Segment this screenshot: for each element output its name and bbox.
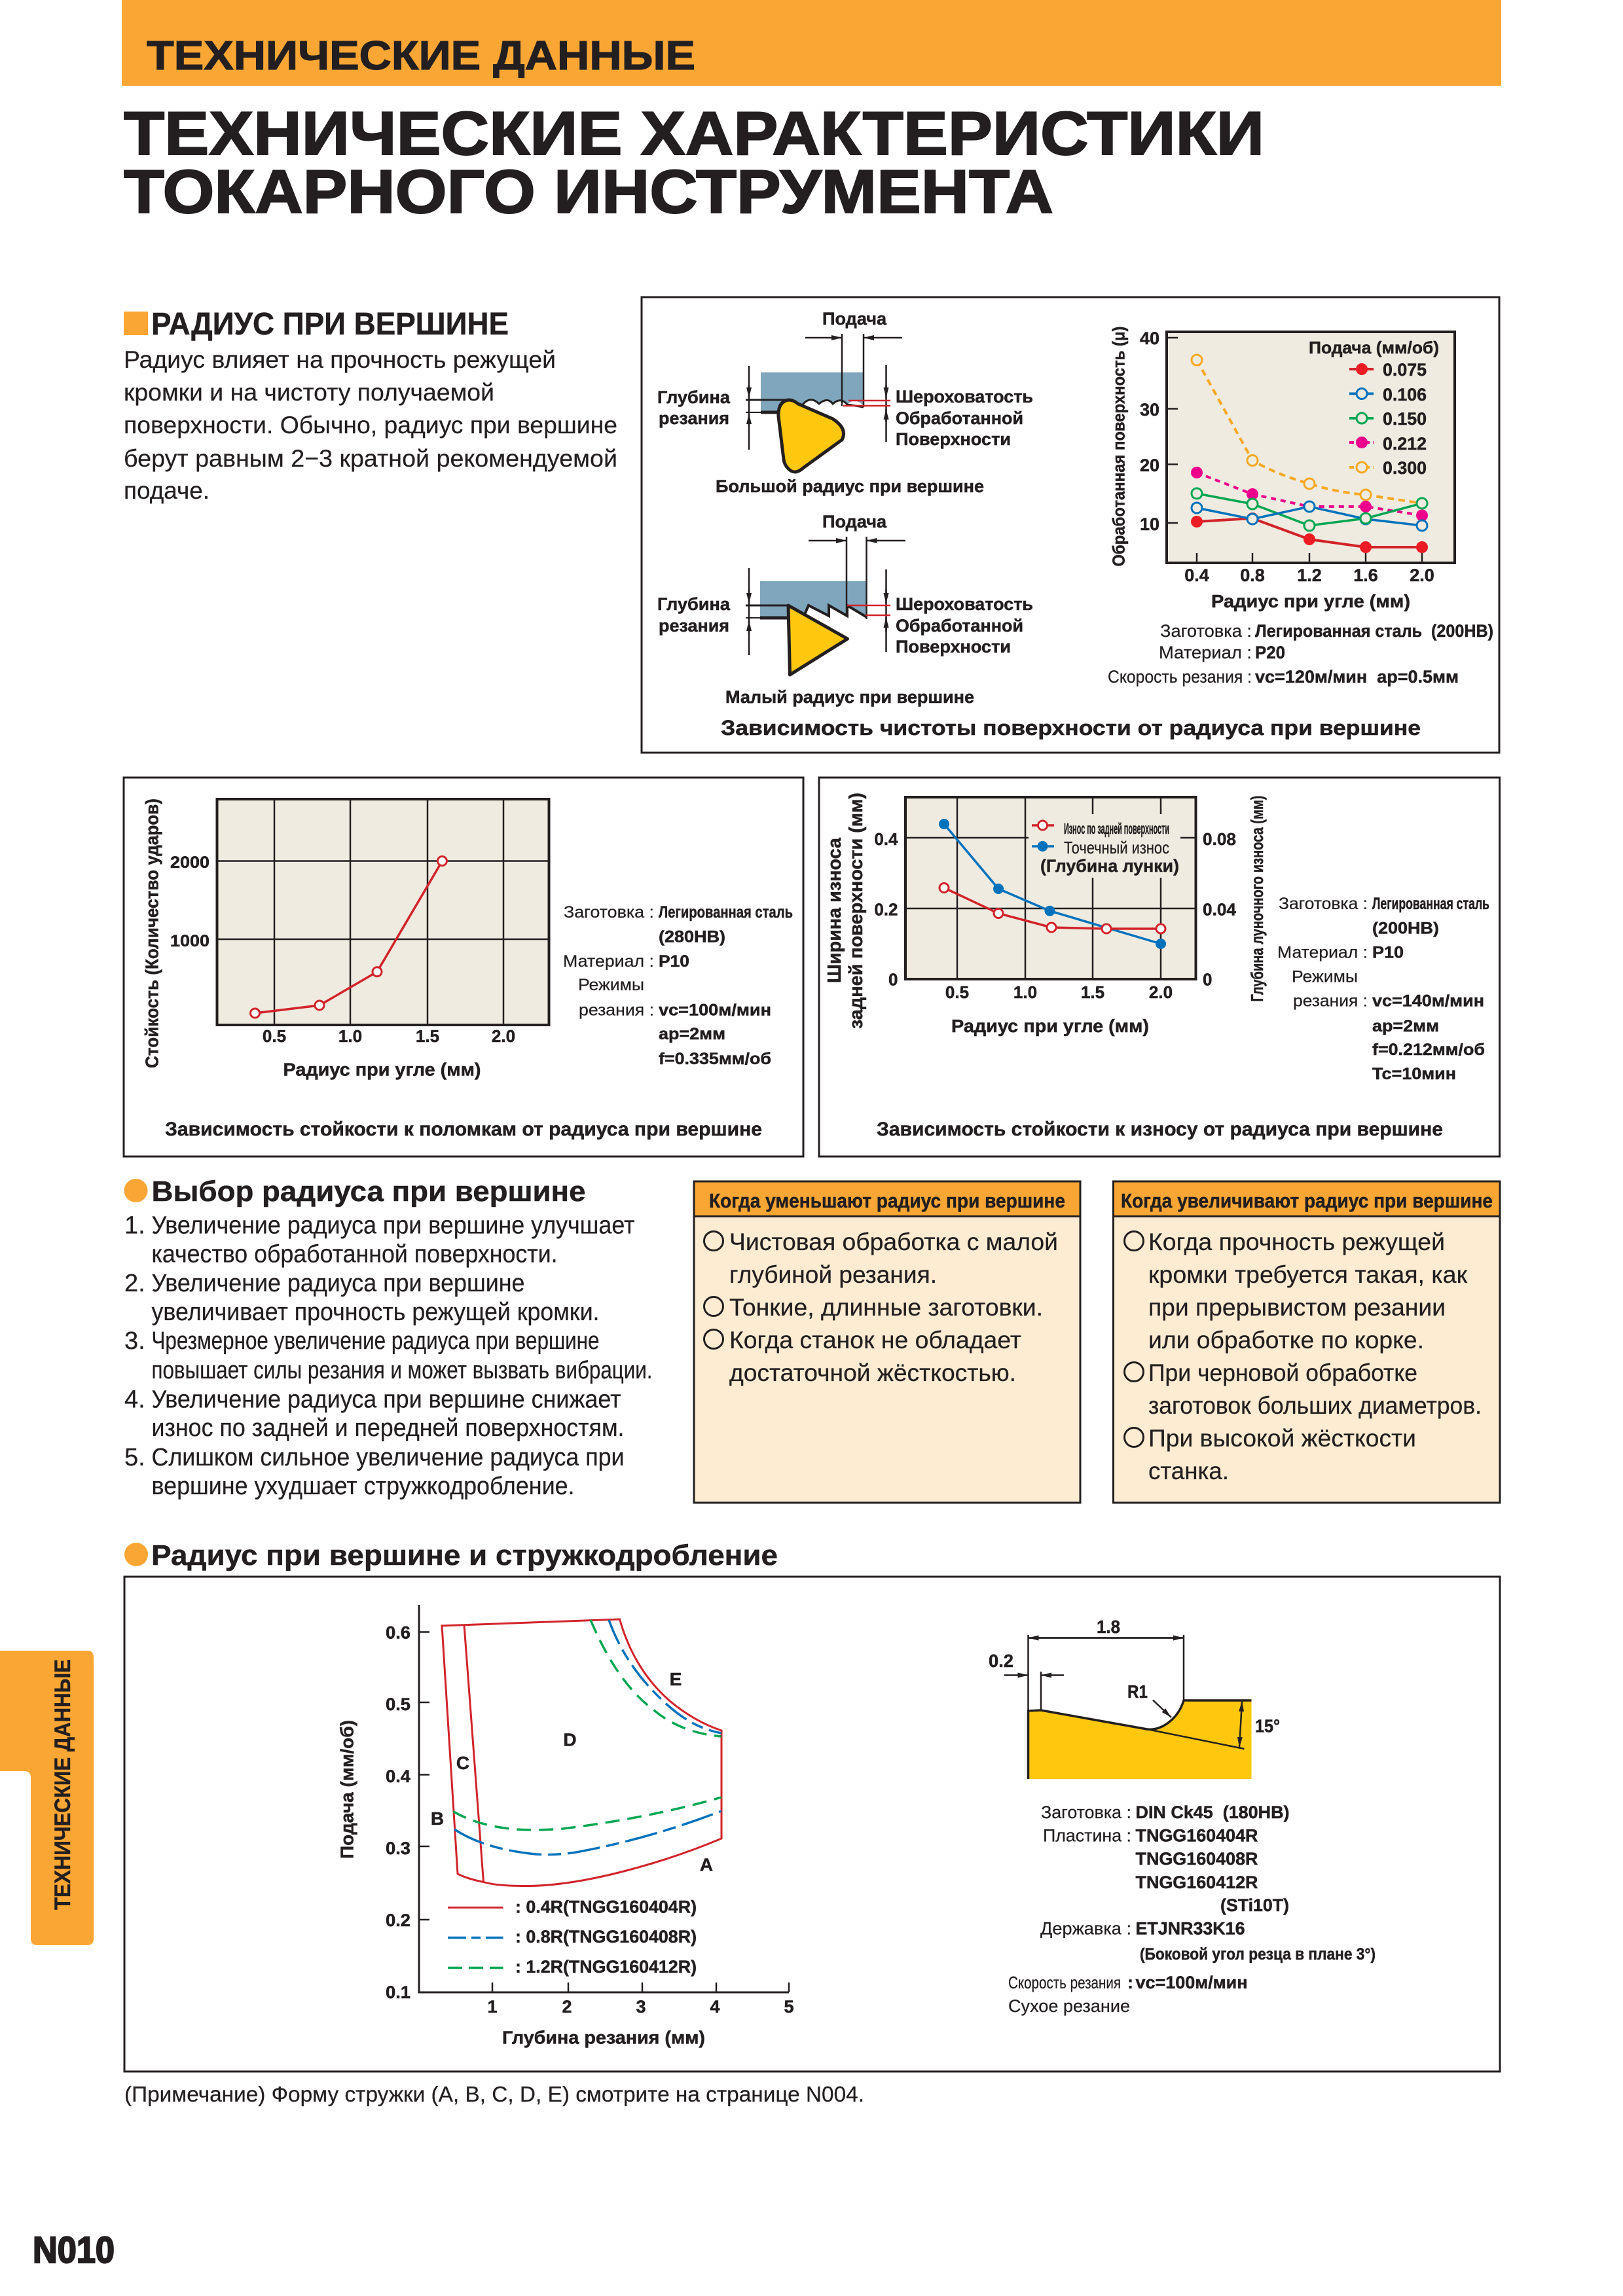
test conditions: breakage: Режимы [578, 976, 644, 994]
test conditions: chip breaking: Сухое резание [1008, 1996, 1130, 2016]
test conditions: chip breaking: Заготовка : [1041, 1803, 1131, 1822]
diagram: small nose radius [657, 512, 1033, 707]
line chart: flank and crater wear: задней поверхности (мм) [846, 793, 867, 1029]
header bar: ТЕХНИЧЕСКИЕ ДАННЫЕ [147, 33, 695, 79]
test conditions: chip breaking: Державка : [1040, 1919, 1131, 1939]
line chart: surface roughness: 20 [1140, 456, 1159, 475]
diagram: chipbreaker profile [989, 1617, 1280, 1779]
test conditions: breakage: Заготовка : [564, 903, 654, 922]
test conditions: chip breaking: : [1127, 1973, 1133, 1992]
line chart: impact count [141, 798, 549, 1080]
diagram: large nose radius: резания [659, 408, 729, 428]
test conditions: wear: Tc=10мин [1372, 1065, 1456, 1083]
chart: chip control regions [337, 1605, 794, 2047]
line chart: impact count: 0.5 [263, 1026, 286, 1046]
line chart: flank and crater wear [824, 793, 1267, 1036]
panel: when radius is increased: станка. [1148, 1458, 1229, 1484]
test conditions: chip breaking: (Боковой угол резца в плане 3°) [1140, 1945, 1376, 1964]
numbered list: вершине ухудшает стружкодробление. [152, 1473, 575, 1500]
chart: chip control regions: B [431, 1808, 444, 1829]
diagram: large nose radius: Поверхности [896, 429, 1011, 449]
panel: tool life vs breakage [124, 778, 803, 1157]
test conditions: wear: f=0.212мм/об [1372, 1041, 1485, 1059]
line chart: flank and crater wear: 0 [888, 970, 898, 990]
test conditions: breakage: резания : [579, 1001, 654, 1020]
intro paragraph: подаче. [124, 477, 210, 504]
legend: feed rates: 0.075 [1383, 360, 1427, 380]
test conditions: wear: Материал : [1277, 944, 1368, 962]
test conditions: breakage: vc=100м/мин [659, 1001, 771, 1020]
diagram: large nose radius [657, 309, 1033, 496]
line chart: impact count: 1.0 [338, 1026, 362, 1046]
test conditions: chip breaking: DIN Ck45 (180HB) [1135, 1803, 1290, 1822]
diagram: small nose radius: Малый радиус при вершине [725, 687, 974, 707]
test conditions: surface finish: Скорость резания : [1108, 667, 1252, 687]
legend: feed rates: 0.212 [1383, 434, 1427, 454]
legend: feed rates [1309, 338, 1439, 478]
panel: tool life vs wear [819, 778, 1499, 1157]
test conditions: wear: (200HB) [1372, 919, 1439, 937]
numbered list: Увеличение радиуса при вершине улучшает [152, 1212, 635, 1240]
diagram: small nose radius: Поверхности [896, 637, 1011, 656]
line chart: surface roughness: Радиус при угле (мм) [1211, 591, 1410, 611]
line chart: flank and crater wear: 1.0 [1013, 982, 1037, 1002]
page number: N010 [33, 2229, 115, 2271]
side tab [0, 1651, 94, 1945]
panel: when radius is increased: При высокой жёсткости [1148, 1425, 1416, 1452]
line chart: surface roughness: 0.4 [1184, 565, 1209, 585]
line chart: surface roughness: 0.8 [1240, 565, 1265, 585]
chart: chip control regions: 0.4 [386, 1767, 410, 1786]
side tab: ТЕХНИЧЕСКИЕ ДАННЫЕ [50, 1659, 75, 1910]
test conditions: breakage: P10 [659, 952, 689, 971]
numbered list: 3. [124, 1327, 145, 1355]
test conditions: wear: ap=2мм [1372, 1017, 1439, 1035]
test conditions: wear: Режимы [1292, 967, 1358, 986]
legend: feed rates: 0.300 [1383, 458, 1427, 478]
legend: insert radii: : 1.2R(TNGG160412R) [515, 1957, 697, 1977]
title: ТЕХНИЧЕСКИЕ ХАРАКТЕРИСТИКИ [124, 99, 1264, 168]
diagram: chipbreaker profile: R1 [1127, 1681, 1148, 1702]
panel caption: Зависимость стойкости к поломкам от радиуса при вершине [165, 1119, 762, 1140]
line chart: impact count: Стойкость (Количество ударов) [141, 798, 162, 1068]
diagram: small nose radius: Глубина [657, 594, 731, 614]
test conditions: surface finish: Заготовка : [1160, 621, 1252, 641]
intro paragraph [124, 346, 617, 504]
chart: chip control regions: 0.2 [386, 1910, 410, 1930]
line chart: flank and crater wear: 0 [1203, 970, 1212, 990]
line chart: flank and crater wear: Ширина износа [824, 837, 845, 983]
line chart: impact count: Радиус при угле (мм) [283, 1059, 481, 1080]
panel caption: Зависимость стойкости к износу от радиуса при вершине [877, 1119, 1443, 1140]
panel: when radius is increased: или обработке по корке. [1148, 1327, 1424, 1354]
diagram: large nose radius: Обработанной [896, 408, 1023, 428]
section heading: nose radius: РАДИУС ПРИ ВЕРШИНЕ [151, 307, 509, 342]
legend: insert radii: : 0.4R(TNGG160404R) [515, 1897, 697, 1916]
panel: when radius is reduced: Чистовая обработка с малой [729, 1229, 1058, 1255]
numbered list: износ по задней и передней поверхностям. [152, 1414, 625, 1442]
test conditions: wear: P10 [1372, 944, 1404, 962]
numbered list: повышает силы резания и может вызвать вибрации. [152, 1357, 652, 1384]
test conditions: chip breaking: TNGG160412R [1135, 1873, 1258, 1892]
line chart: flank and crater wear: 1.5 [1081, 982, 1104, 1002]
panel: when radius is increased: кромки требуется такая, как [1148, 1261, 1468, 1288]
test conditions: chip breaking: Скорость резания [1008, 1973, 1121, 1992]
test conditions: chip breaking: Пластина : [1043, 1826, 1131, 1846]
chart: chip control regions: E [670, 1669, 682, 1689]
numbered list: 5. [124, 1444, 145, 1471]
legend: wear types [1032, 820, 1179, 876]
intro paragraph: кромки и на чистоту получаемой [124, 379, 494, 406]
intro paragraph: Радиус влияет на прочность режущей [124, 346, 556, 373]
chart: chip control regions: Глубина резания (мм) [502, 2028, 705, 2047]
test conditions: wear: Заготовка : [1279, 895, 1368, 913]
title [124, 99, 1264, 226]
chart: chip control regions: 0.5 [386, 1695, 410, 1714]
line chart: impact count: 2000 [170, 853, 210, 872]
numbered list: увеличивает прочность режущей кромки. [152, 1299, 600, 1326]
title: ТОКАРНОГО ИНСТРУМЕНТА [124, 157, 1053, 226]
panel: when radius is increased [1113, 1181, 1500, 1503]
legend: wear types: Износ по задней поверхности [1064, 820, 1169, 837]
chart: chip control regions: 1 [487, 1997, 498, 2017]
legend: feed rates: Подача (мм/об) [1309, 338, 1439, 357]
panel: when radius is reduced: достаточной жёсткостью. [729, 1359, 1016, 1386]
line chart: impact count: 2.0 [492, 1026, 515, 1046]
test conditions: wear [1277, 895, 1489, 1083]
intro paragraph: берут равным 2−3 кратной рекомендуемой [124, 445, 617, 472]
test conditions: breakage: (280HB) [659, 928, 725, 946]
numbered list: Увеличение радиуса при вершине снижает [152, 1386, 621, 1414]
test conditions: chip breaking [1008, 1803, 1376, 2016]
chart: chip control regions: 2 [562, 1997, 572, 2017]
diagram: chipbreaker profile: 15° [1255, 1716, 1280, 1736]
test conditions: chip breaking: ETJNR33K16 [1135, 1919, 1245, 1939]
panel: when radius is reduced [694, 1181, 1080, 1503]
line chart: flank and crater wear: Радиус при угле (мм) [951, 1016, 1149, 1036]
diagram: chipbreaker profile: 1.8 [1097, 1617, 1120, 1637]
diagram: large nose radius: Большой радиус при вершине [716, 476, 984, 496]
chart: chip control regions: A [700, 1855, 713, 1874]
chart: chip control regions: 0.1 [386, 1982, 410, 2002]
intro paragraph: поверхности. Обычно, радиус при вершине [124, 412, 617, 439]
diagram: small nose radius: Шероховатость [896, 594, 1033, 614]
numbered list: 1. [124, 1212, 145, 1240]
test conditions: surface finish: P20 [1255, 643, 1285, 662]
numbered list: 2. [124, 1270, 145, 1297]
legend: wear types: Точечный износ [1064, 838, 1169, 857]
test conditions: wear: резания : [1293, 992, 1368, 1011]
test conditions: surface finish: Материал : [1159, 643, 1252, 662]
chart: chip control regions: C [456, 1753, 469, 1773]
diagram: large nose radius: Глубина [657, 387, 731, 407]
test conditions: wear: Легированная сталь [1372, 895, 1489, 913]
test conditions: surface finish: vc=120м/мин ap=0.5мм [1255, 667, 1459, 687]
footnote: (Примечание) Форму стружки (A, B, C, D, E) смотрите на странице N004. [124, 2082, 864, 2106]
line chart: surface roughness: Обработанная поверхность (μ) [1109, 326, 1129, 567]
chart: chip control regions: 5 [784, 1997, 794, 2017]
line chart: impact count: 1.5 [416, 1026, 439, 1046]
header bar [122, 0, 1501, 86]
numbered list: качество обработанной поверхности. [152, 1241, 558, 1268]
chart: chip control regions: 4 [710, 1997, 720, 2017]
chart: chip control regions: Подача (мм/об) [337, 1720, 357, 1859]
diagram: chipbreaker profile: 0.2 [989, 1651, 1013, 1671]
line chart: flank and crater wear: 0.08 [1203, 829, 1236, 849]
panel: chip breaking [124, 1577, 1500, 2072]
panel: when radius is increased: при прерывистом резании [1148, 1294, 1446, 1321]
diagram: small nose radius: резания [659, 616, 729, 636]
legend: insert radii [448, 1897, 697, 1977]
panel: when radius is reduced: Когда станок не обладает [729, 1327, 1021, 1354]
panel: surface finish vs nose radius [642, 297, 1499, 753]
numbered list [124, 1212, 652, 1500]
line chart: surface roughness: 10 [1140, 514, 1159, 534]
test conditions: chip breaking: TNGG160408R [1135, 1849, 1258, 1869]
chart: chip control regions: 0.6 [386, 1623, 410, 1643]
test conditions: wear: vc=140м/мин [1372, 992, 1484, 1011]
line chart: surface roughness: 30 [1140, 400, 1159, 420]
panel: when radius is increased: Когда увеличивают радиус при вершине [1121, 1189, 1493, 1212]
test conditions: breakage: ap=2мм [659, 1025, 725, 1043]
legend: feed rates: 0.150 [1383, 409, 1427, 429]
panel: when radius is reduced: Когда уменьшают радиус при вершине [709, 1189, 1065, 1212]
line chart: surface roughness: 1.2 [1297, 565, 1322, 585]
legend: insert radii: : 0.8R(TNGG160408R) [515, 1927, 697, 1946]
line chart: impact count: 1000 [170, 932, 210, 950]
line chart: flank and crater wear: Глубина луночного износа (мм) [1247, 796, 1267, 1001]
panel: when radius is increased: При черновой обработке [1148, 1359, 1417, 1386]
panel: when radius is increased: Когда прочность режущей [1148, 1229, 1445, 1255]
line chart: flank and crater wear: 0.2 [874, 899, 898, 919]
line chart: flank and crater wear: 0.5 [945, 982, 969, 1002]
line chart: surface roughness [1109, 326, 1455, 611]
chart: chip control regions: 3 [636, 1997, 646, 2017]
numbered list: 4. [124, 1386, 145, 1414]
legend: wear types: (Глубина лунки) [1040, 856, 1179, 876]
diagram: small nose radius: Обработанной [896, 616, 1023, 636]
test conditions: chip breaking: TNGG160404R [1135, 1826, 1258, 1846]
line chart: flank and crater wear: 0.04 [1203, 899, 1237, 919]
chart: chip control regions: D [563, 1729, 577, 1750]
line chart: flank and crater wear: 0.4 [874, 829, 898, 849]
numbered list: Чрезмерное увеличение радиуса при вершине [152, 1327, 600, 1355]
numbered list: Слишком сильное увеличение радиуса при [152, 1444, 625, 1471]
diagram: small nose radius: Подача [822, 512, 887, 531]
section heading: chip breaking: Радиус при вершине и стружкодробление [151, 1539, 778, 1571]
chart: chip control regions: 0.3 [386, 1839, 410, 1858]
diagram: large nose radius: Подача [822, 309, 887, 329]
panel: when radius is increased: заготовок больших диаметров. [1148, 1392, 1482, 1419]
numbered list: Увеличение радиуса при вершине [152, 1270, 525, 1297]
legend: feed rates: 0.106 [1383, 385, 1427, 404]
test conditions: surface finish [1108, 621, 1493, 687]
panel: when radius is reduced: глубиной резания. [729, 1261, 937, 1288]
line chart: surface roughness: 2.0 [1410, 565, 1434, 585]
test conditions: surface finish: Легированная сталь (200HB) [1255, 621, 1493, 641]
test conditions: breakage: Материал : [563, 952, 654, 971]
panel: when radius is reduced: Тонкие, длинные заготовки. [729, 1294, 1043, 1321]
test conditions: breakage: f=0.335мм/об [659, 1050, 771, 1068]
line chart: surface roughness: 40 [1140, 329, 1159, 348]
panel caption: Зависимость чистоты поверхности от радиуса при вершине [721, 716, 1421, 740]
line chart: flank and crater wear: 2.0 [1149, 982, 1173, 1002]
section heading: selecting nose radius: Выбор радиуса при вершине [152, 1175, 585, 1208]
line chart: surface roughness: 1.6 [1353, 565, 1378, 585]
diagram: large nose radius: Шероховатость [896, 387, 1033, 406]
test conditions: chip breaking: vc=100м/мин [1135, 1973, 1248, 1992]
test conditions: chip breaking: (STi10T) [1220, 1895, 1289, 1915]
test conditions: breakage [563, 903, 793, 1068]
test conditions: breakage: Легированная сталь [659, 903, 793, 922]
